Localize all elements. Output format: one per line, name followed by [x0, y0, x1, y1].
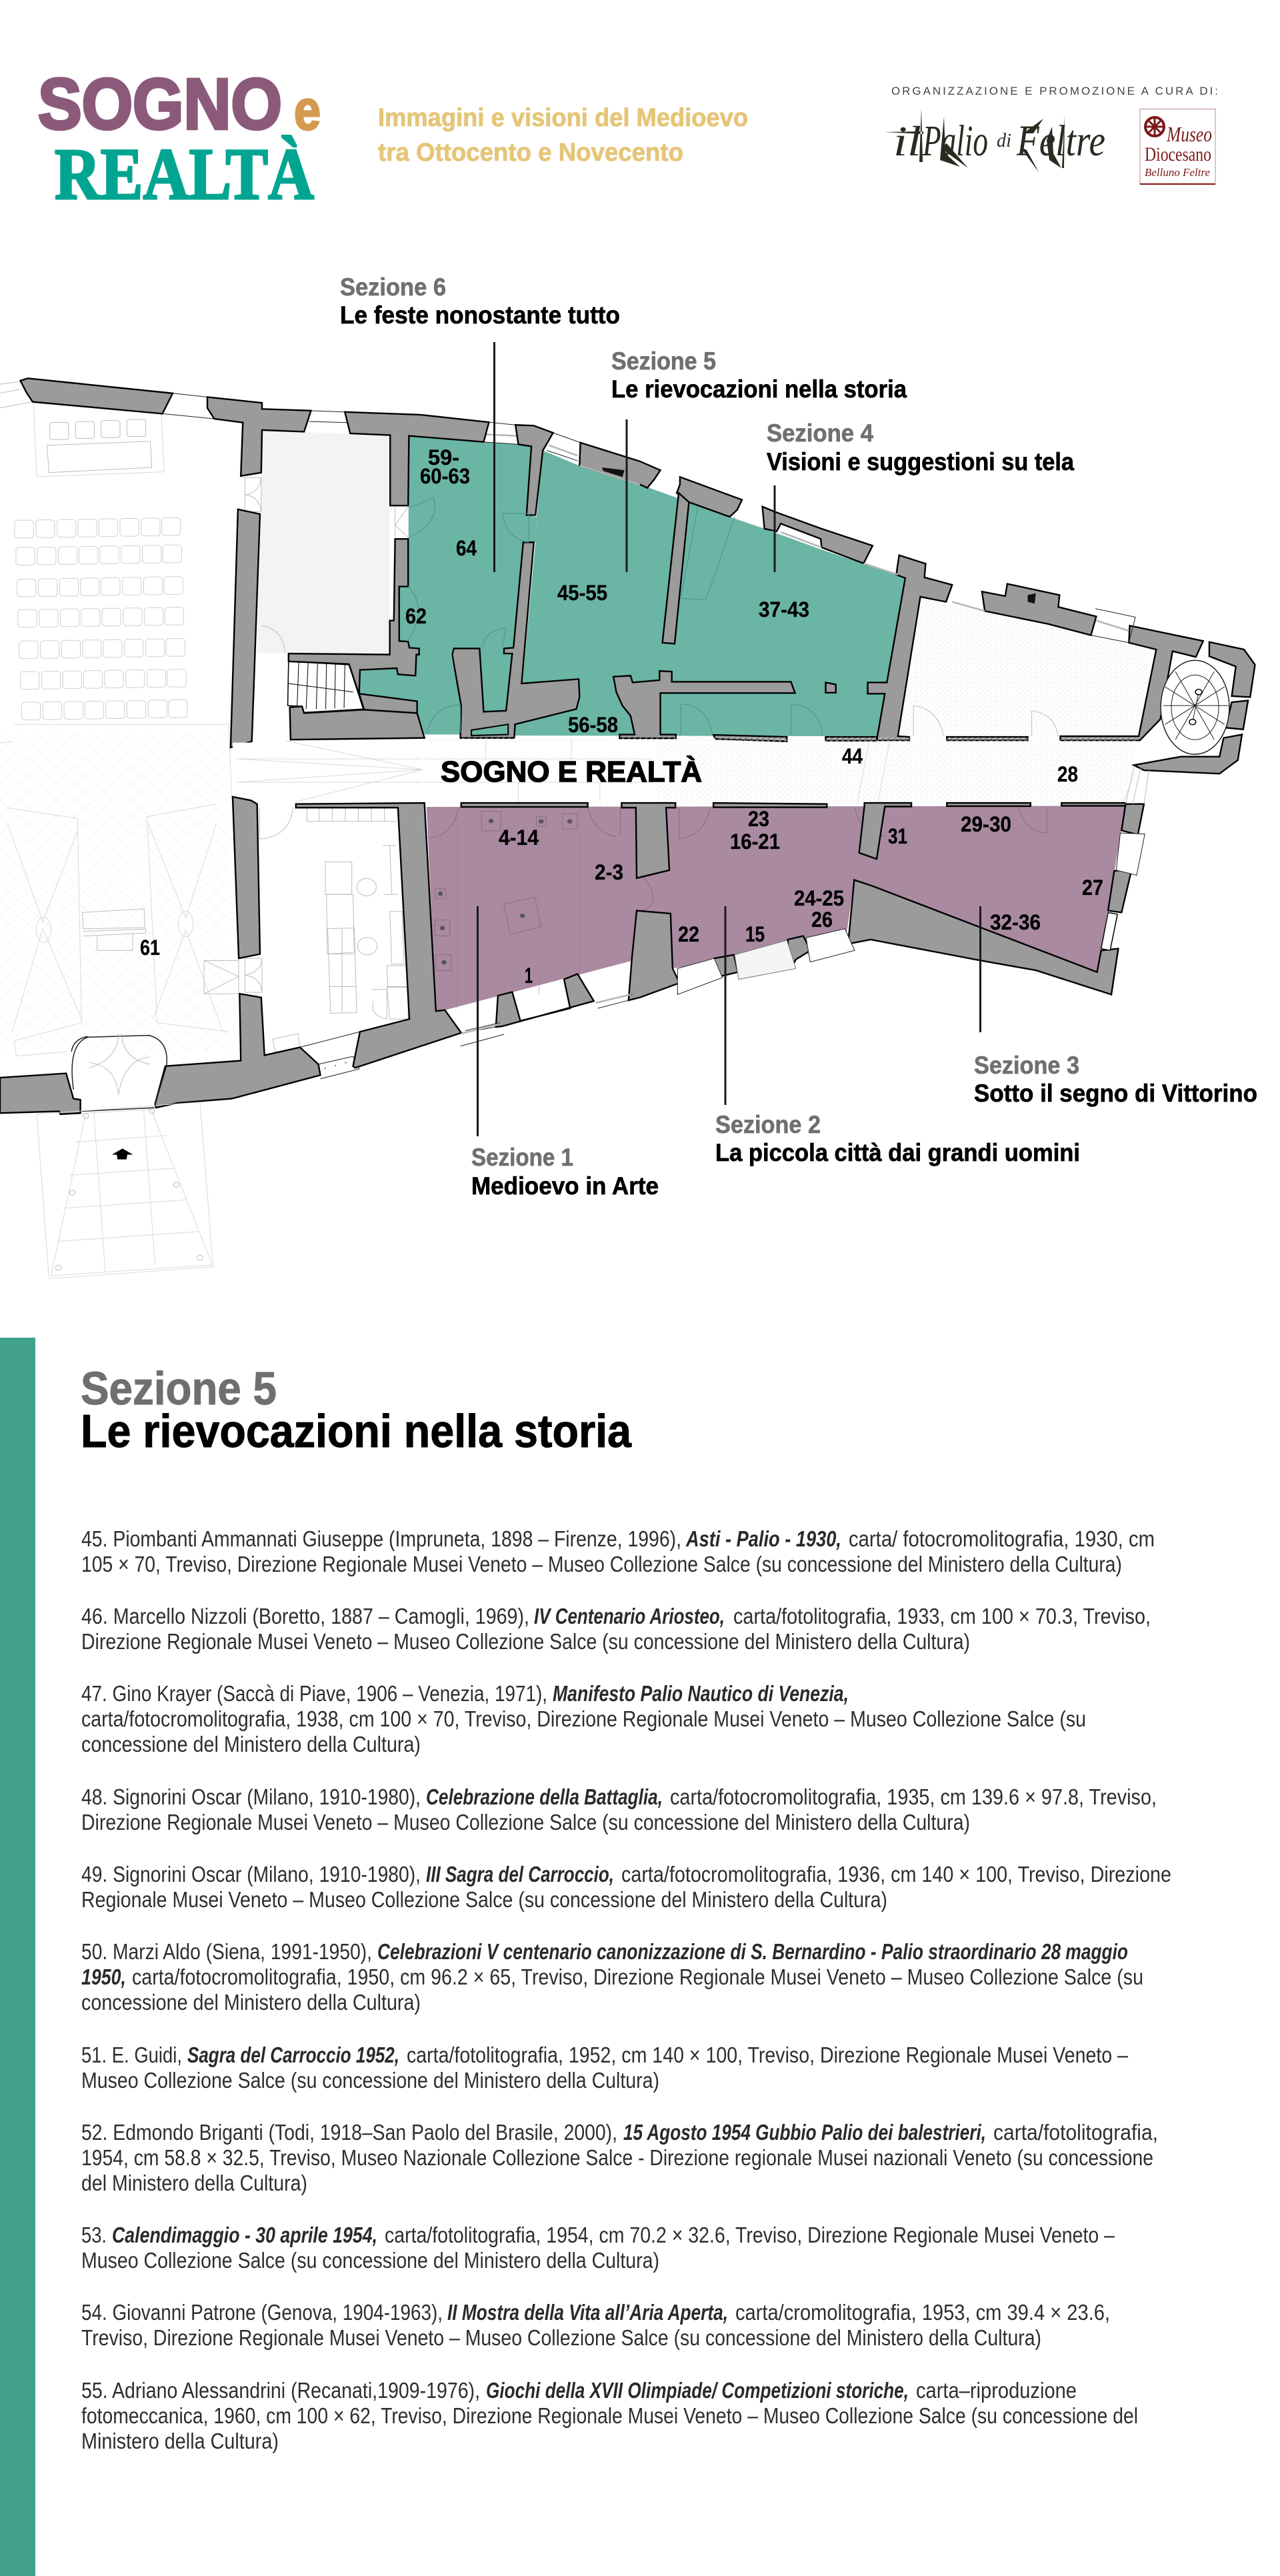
catalogue entry 55: carta–riproduzione: [916, 2378, 1077, 2403]
section heading: [81, 1362, 632, 1457]
room numbers: 61: [140, 936, 160, 960]
header: exhibition logo: [38, 63, 321, 215]
room numbers: 24-25: [794, 886, 844, 910]
logo: il Palio di Feltre: di: [997, 129, 1011, 151]
catalogue entry 47: carta/fotocromolitografia, 1938, cm 100 × 70, Treviso, Direzione Regionale Musei Veneto – Museo Collezione Salce (su: [81, 1706, 1086, 1731]
catalogue entry 54: Treviso, Direzione Regionale Musei Veneto – Museo Collezione Salce (su concessione del Ministero della Cultura): [81, 2325, 1041, 2350]
room fill: purple sections 1, 2, 3: [427, 806, 1125, 1011]
corridor fill: herringbone: [429, 737, 1139, 804]
catalogue entry 53: Calendimaggio - 30 aprile 1954,: [112, 2223, 377, 2247]
room numbers: 23: [748, 807, 769, 831]
label: sezione 6: Sezione 6: [340, 273, 446, 301]
logo: il Palio di Feltre: Feltre: [1016, 117, 1105, 165]
catalogue entry 55: [81, 2378, 1138, 2453]
logo: Museo Diocesano: Diocesano: [1145, 143, 1211, 165]
catalogue entry 48: [81, 1784, 1157, 1834]
corridor fill: white panel behind title: [233, 743, 657, 802]
catalogue entry 53: 53.: [81, 2223, 107, 2247]
logo: il Palio di Feltre: [885, 108, 1105, 172]
catalogue entry 46: [81, 1604, 1151, 1654]
organisers caption: ORGANIZZAZIONE E PROMOZIONE A CURA DI:: [891, 85, 1218, 97]
section heading: Sezione 5: [81, 1362, 277, 1414]
catalogue entry 48: Celebrazione della Battaglia,: [426, 1784, 663, 1809]
room numbers: 56-58: [568, 713, 618, 737]
room numbers: 26: [811, 908, 833, 932]
walls: lower left: [0, 797, 679, 1114]
leader line: sezione 2: [724, 906, 727, 1105]
room fill: teal pocket: [359, 668, 417, 702]
catalogue entry 55: 55. Adriano Alessandrini (Recanati,1909-1976),: [81, 2378, 480, 2403]
label: sezione 2: [715, 1111, 1080, 1166]
catalogue entry 49: III Sagra del Carroccio,: [426, 1862, 614, 1886]
logo: il Palio di Feltre: il: [893, 117, 921, 165]
catalogue entry 47: Manifesto Palio Nautico di Venezia,: [553, 1681, 849, 1706]
room numbers: 37-43: [759, 597, 809, 621]
label: sezione 4: [767, 419, 1074, 475]
catalogue entry 52: del Ministero della Cultura): [81, 2171, 307, 2195]
catalogue entry 49: Regionale Musei Veneto – Museo Collezione Salce (su concessione del Ministero della Cultura): [81, 1887, 887, 1912]
label: sezione 2: Sezione 2: [715, 1111, 821, 1138]
catalogue entry 50: carta/fotocromolitografia, 1950, cm 96.2 × 65, Treviso, Direzione Regionale Musei Veneto – Museo Collezione Salce (su: [132, 1965, 1143, 1989]
room numbers: 1: [525, 964, 533, 988]
catalogue entry 52: 15 Agosto 1954 Gubbio Palio dei balestrieri,: [623, 2120, 986, 2145]
catalogue entry 47: concessione del Ministero della Cultura): [81, 1732, 421, 1756]
leader line: sezione 1: [477, 906, 479, 1136]
catalogue entry 49: carta/fotocromolitografia, 1936, cm 140 × 100, Treviso, Direzione: [621, 1862, 1171, 1886]
label: sezione 5: Sezione 5: [611, 347, 716, 375]
catalogue entry 52: 52. Edmondo Briganti (Todi, 1918–San Paolo del Brasile, 2000),: [81, 2120, 617, 2145]
catalogue entry 49: [81, 1862, 1171, 1912]
room numbers: 22: [678, 922, 699, 946]
walls: upper right: [579, 465, 1255, 774]
stage furniture: [0, 381, 581, 799]
panel: teal side bar: [0, 1338, 35, 2576]
plan title: SOGNO E REALTÀ: [441, 755, 702, 788]
logo word: e: e: [294, 79, 321, 141]
walls: upper left: [21, 378, 661, 748]
catalogue entry 55: Ministero della Cultura): [81, 2429, 279, 2453]
catalogue entry 45: 45. Piombanti Ammannati Giuseppe (Impruneta, 1898 – Firenze, 1996),: [81, 1526, 681, 1551]
section heading: Le rievocazioni nella storia: [81, 1405, 632, 1457]
catalogue entry 46: carta/fotolitografia, 1933, cm 100 × 70.3, Treviso,: [733, 1604, 1151, 1628]
room fill: speckled light room: [257, 431, 390, 655]
logo word: SOGNO: SOGNO: [38, 63, 282, 144]
label: sezione 6: Le feste nonostante tutto: [340, 301, 620, 329]
room numbers: 31: [888, 824, 907, 848]
floor plan: corridor and lower half: [0, 734, 1149, 1278]
label: sezione 1: Medioevo in Arte: [471, 1172, 659, 1200]
catalogue entry 51: Museo Collezione Salce (su concessione del Ministero della Cultura): [81, 2068, 659, 2093]
catalogue entry 48: carta/fotocromolitografia, 1935, cm 139.6 × 97.8, Treviso,: [670, 1784, 1157, 1809]
catalogue entry 51: 51. E. Guidi,: [81, 2043, 182, 2067]
leader line: sezione 4: [773, 485, 776, 572]
tagline: Immagini e visioni del Medioevo: [378, 104, 748, 132]
room numbers: 16-21: [730, 830, 780, 854]
room numbers: 15: [745, 922, 765, 946]
room numbers: 28: [1057, 762, 1078, 786]
room numbers: 4-14: [499, 826, 539, 850]
leader line: sezione 3: [979, 906, 981, 1032]
catalogue entry 45: 105 × 70, Treviso, Direzione Regionale Musei Veneto – Museo Collezione Salce (su concessione del Ministero della Cultura): [81, 1552, 1122, 1576]
label: sezione 5: [611, 347, 907, 403]
label: sezione 4: Sezione 4: [767, 419, 873, 447]
label: sezione 1: [471, 1144, 659, 1200]
catalogue entry 55: Giochi della XVII Olimpiade/ Competizioni storiche,: [486, 2378, 909, 2403]
catalogue entry 52: [81, 2120, 1158, 2195]
label: sezione 4: Visioni e suggestioni su tela: [767, 448, 1074, 475]
catalogue entry 50: 1950,: [81, 1965, 126, 1989]
catalogue entry 50: concessione del Ministero della Cultura): [81, 1990, 421, 2015]
catalogue entry 45: carta/ fotocromolitografia, 1930, cm: [849, 1526, 1155, 1551]
room numbers: 62: [405, 604, 427, 628]
walls: lower right: [677, 767, 1149, 994]
room numbers: [140, 445, 1103, 988]
catalogue entry 50: [81, 1939, 1143, 2015]
logo: Museo Diocesano: Museo: [1166, 122, 1212, 146]
stairs: [288, 662, 363, 712]
catalogue entry 54: carta/cromolitografia, 1953, cm 39.4 × 23.6,: [735, 2300, 1110, 2325]
floor plan: upper half: [0, 378, 1255, 799]
catalogue entry 54: [81, 2300, 1110, 2350]
catalogue entry 51: [81, 2043, 1129, 2093]
catalogue entry 50: 50. Marzi Aldo (Siena, 1991-1950),: [81, 1939, 372, 1964]
catalogue entry 46: IV Centenario Ariosteo,: [534, 1604, 725, 1628]
catalogue entry 53: [81, 2223, 1115, 2273]
label: sezione 3: [974, 1052, 1257, 1107]
catalogue entry 48: 48. Signorini Oscar (Milano, 1910-1980),: [81, 1784, 421, 1809]
label: sezione 5: Le rievocazioni nella storia: [611, 375, 907, 403]
catalogue entry 48: Direzione Regionale Musei Veneto – Museo Collezione Salce (su concessione del Ministero della Cultura): [81, 1810, 970, 1834]
tagline: [378, 104, 748, 167]
label: sezione 3: Sotto il segno di Vittorino: [974, 1080, 1257, 1107]
label: sezione 6: [340, 273, 620, 329]
room fill: teal sections 5 and 4: [514, 451, 905, 736]
room numbers: 2-3: [595, 860, 623, 884]
garden lattice: [0, 734, 231, 1055]
catalogue entry 51: carta/fotolitografia, 1952, cm 140 × 100, Treviso, Direzione Regionale Musei Veneto –: [407, 2043, 1129, 2067]
room fill: teal section 6: [399, 436, 537, 735]
room numbers: 60-63: [420, 464, 470, 488]
catalogue entry 47: 47. Gino Krayer (Saccà di Piave, 1906 – Venezia, 1971),: [81, 1681, 547, 1706]
catalogue entry 51: Sagra del Carroccio 1952,: [187, 2043, 399, 2067]
catalogue entry 53: carta/fotolitografia, 1954, cm 70.2 × 32.6, Treviso, Direzione Regionale Musei Veneto –: [385, 2223, 1115, 2247]
auditorium seats: [15, 518, 187, 720]
logo: il Palio di Feltre: Palio: [922, 117, 988, 165]
room numbers: 45-55: [557, 581, 607, 605]
icon: entrance arrow: [112, 1148, 133, 1160]
logo: Museo Diocesano: [1140, 109, 1215, 185]
leader line: sezione 6: [493, 342, 495, 572]
main entrance: [37, 1034, 213, 1278]
catalogue entry 45: [81, 1526, 1155, 1576]
doors in teal rooms: [408, 498, 1058, 736]
room fill: herringbone right room: [898, 598, 1152, 736]
catalogue entry 53: Museo Collezione Salce (su concessione del Ministero della Cultura): [81, 2248, 659, 2273]
catalogue entry 45: Asti - Palio - 1930,: [685, 1526, 841, 1551]
catalogue entry 52: carta/fotolitografia,: [993, 2120, 1158, 2145]
spiral staircase: [1161, 660, 1229, 754]
catalogue entry 49: 49. Signorini Oscar (Milano, 1910-1980),: [81, 1862, 421, 1886]
catalogue entry 54: 54. Giovanni Patrone (Genova, 1904-1963),: [81, 2300, 443, 2325]
catalogue entry 54: II Mostra della Vita all’Aria Aperta,: [447, 2300, 728, 2325]
logo word: REALTÀ: REALTÀ: [55, 133, 314, 215]
label: sezione 3: Sezione 3: [974, 1052, 1079, 1079]
leader line: sezione 5: [625, 419, 628, 572]
café furniture: [204, 808, 408, 1079]
corridor paving lines: [237, 739, 1135, 804]
catalogue entry 46: 46. Marcello Nizzoli (Boretto, 1887 – Camogli, 1969),: [81, 1604, 529, 1628]
room numbers: 59-: [428, 445, 459, 469]
logo: Museo Diocesano: Belluno Feltre: [1145, 166, 1210, 179]
room numbers: 64: [456, 536, 477, 560]
room numbers: 29-30: [961, 812, 1011, 836]
room numbers: 27: [1082, 876, 1103, 900]
tagline: tra Ottocento e Novecento: [378, 139, 683, 167]
catalogue entry 55: fotomeccanica, 1960, cm 100 × 62, Treviso, Direzione Regionale Musei Veneto – Museo Collezione Salce (su concessione del: [81, 2403, 1138, 2428]
purple room details: [429, 807, 1047, 1008]
label: sezione 2: La piccola città dai grandi uomini: [715, 1139, 1080, 1166]
room numbers: 32-36: [990, 910, 1041, 934]
catalogue entry 47: [81, 1681, 1086, 1756]
garden paths: [6, 804, 229, 1056]
catalogue entry 46: Direzione Regionale Musei Veneto – Museo Collezione Salce (su concessione del Ministero della Cultura): [81, 1629, 970, 1654]
label: sezione 1: Sezione 1: [471, 1144, 573, 1171]
room numbers: 44: [842, 744, 863, 768]
